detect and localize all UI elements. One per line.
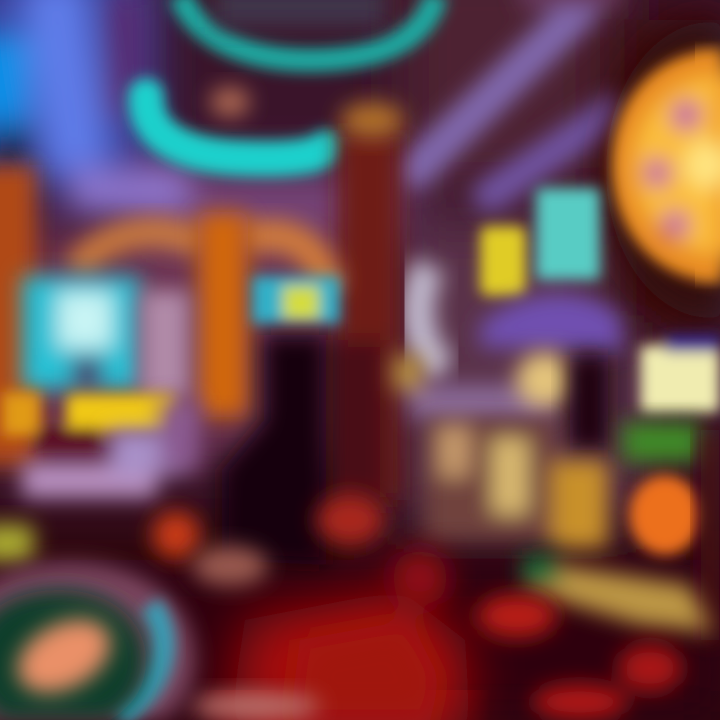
yellow slot screen: [480, 226, 526, 296]
upper teal neon ring: [180, 0, 436, 60]
pale floor highlight: [190, 692, 320, 720]
pale machine panel: [140, 290, 190, 400]
red floor lights: [152, 494, 682, 720]
purple machine canopy: [393, 294, 622, 420]
dark doorway: [222, 335, 326, 565]
teal and yellow screen: [252, 276, 340, 324]
carpet bottom edge: [200, 690, 490, 720]
top left blue glow: [0, 0, 190, 210]
yellow counter: [2, 392, 176, 453]
orange glowing machine: [629, 475, 701, 555]
round gaming table: [0, 562, 195, 720]
green sign: [622, 422, 702, 462]
small orange ceiling light: [210, 87, 250, 117]
row of slot machines: [425, 420, 608, 548]
right white-yellow machine: [640, 336, 720, 413]
right diagonal purple beams: [415, 0, 612, 195]
white curved panel: [418, 265, 445, 370]
wheel dark surround: [606, 20, 720, 320]
pale stool: [192, 546, 268, 586]
large glowing wheel: [612, 40, 720, 290]
right dark red edge: [700, 430, 720, 640]
central dark red column: [326, 130, 400, 510]
arches behind left area: [75, 232, 328, 290]
glowing cream lamp: [516, 352, 572, 408]
lower left pale machines: [22, 400, 200, 498]
green and gold counter: [522, 555, 712, 632]
left edge orange pillar: [0, 165, 36, 465]
left edge small green yellow light: [0, 524, 34, 562]
column capital: [340, 102, 404, 138]
left teal screen: [22, 276, 140, 390]
central orange pillar: [198, 212, 248, 417]
red carpet: [230, 590, 470, 720]
dark panel within ring: [215, 0, 385, 27]
lower teal neon band: [146, 96, 326, 159]
teal slot screen: [536, 188, 600, 280]
dark gap between machines: [570, 355, 608, 450]
